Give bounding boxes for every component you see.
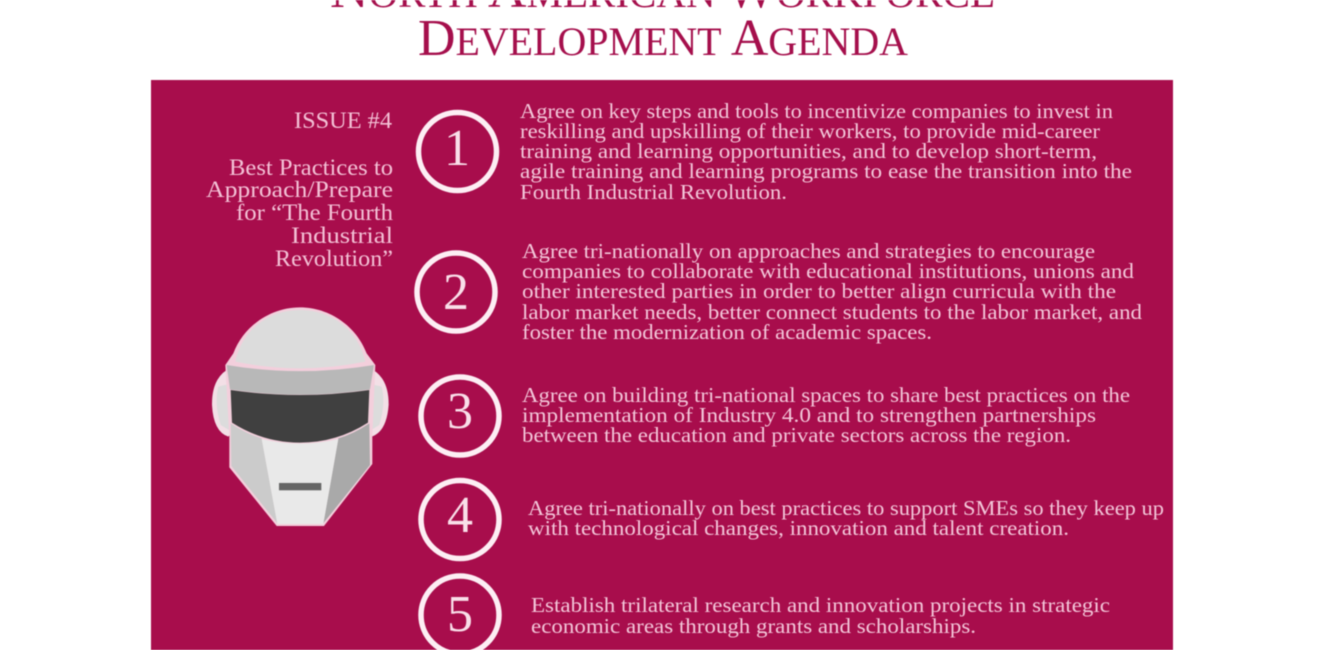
issue heading: ISSUE #4 (294, 108, 393, 133)
item 3 text: Agree on building tri-national spaces to share best practices on the (522, 383, 1130, 407)
item 1 text: Fourth Industrial Revolution. (520, 180, 787, 204)
number badge 1 (418, 112, 496, 190)
number badge 4: 4 (447, 487, 473, 544)
item 5 (421, 576, 1110, 650)
number badge 2: 2 (443, 264, 469, 321)
item 4 (421, 480, 1164, 558)
item 5 text: Establish trilateral research and innovation projects in strategic (531, 593, 1110, 617)
number badge 4 (421, 480, 499, 558)
item 5 text: economic areas through grants and scholarships. (531, 614, 976, 638)
item 2 text: foster the modernization of academic spaces. (522, 320, 932, 344)
item 1 text: Agree on key steps and tools to incentivize companies to invest in (520, 99, 1113, 123)
item 1 text: agile training and learning programs to ease the transition into the (520, 159, 1132, 183)
item 2 text: labor market needs, better connect students to the labor market, and (522, 300, 1142, 324)
item 2 text: companies to collaborate with educational institutions, unions and (522, 259, 1134, 283)
item 1 text: training and learning opportunities, and to develop short-term, (520, 139, 1097, 163)
item 1 text (520, 99, 1132, 204)
number badge 3 (421, 377, 499, 455)
title (330, 0, 995, 67)
item 2 text: other interested parties in order to better align curricula with the (522, 279, 1116, 303)
item 5 text (531, 593, 1110, 638)
item 1 text: reskilling and upskilling of their workers, to provide mid-career (520, 119, 1100, 143)
issue heading: Approach/Prepare (206, 177, 393, 202)
item 4 text: with technological changes, innovation and talent creation. (528, 516, 1069, 540)
item 1 (418, 99, 1132, 204)
item 2 text: Agree tri-nationally on approaches and strategies to encourage (522, 239, 1095, 263)
item 3 (421, 377, 1130, 455)
item 2 text (522, 239, 1142, 344)
number badge 1: 1 (444, 120, 470, 177)
item 4 text: Agree tri-nationally on best practices to support SMEs so they keep up (528, 496, 1164, 520)
number badge 2 (417, 253, 495, 331)
issue heading: for “The Fourth (236, 200, 394, 225)
panel: agenda background (151, 80, 1173, 650)
issue heading: Best Practices to (229, 155, 393, 180)
number badge 3: 3 (447, 383, 473, 440)
item 3 text: between the education and private sectors across the region. (522, 423, 1071, 447)
number badge 5 (421, 576, 499, 650)
issue heading: Revolution” (275, 246, 393, 271)
icon: robot helmet (212, 307, 389, 526)
item 3 text: implementation of Industry 4.0 and to strengthen partnerships (522, 403, 1096, 427)
issue heading (206, 108, 394, 271)
number badge 5: 5 (447, 586, 473, 643)
item 4 text (528, 496, 1164, 540)
title: DEVELOPMENT AGENDA (418, 10, 908, 67)
item 3 text (522, 383, 1130, 447)
issue heading: Industrial (291, 223, 393, 248)
item 2 (417, 239, 1142, 344)
